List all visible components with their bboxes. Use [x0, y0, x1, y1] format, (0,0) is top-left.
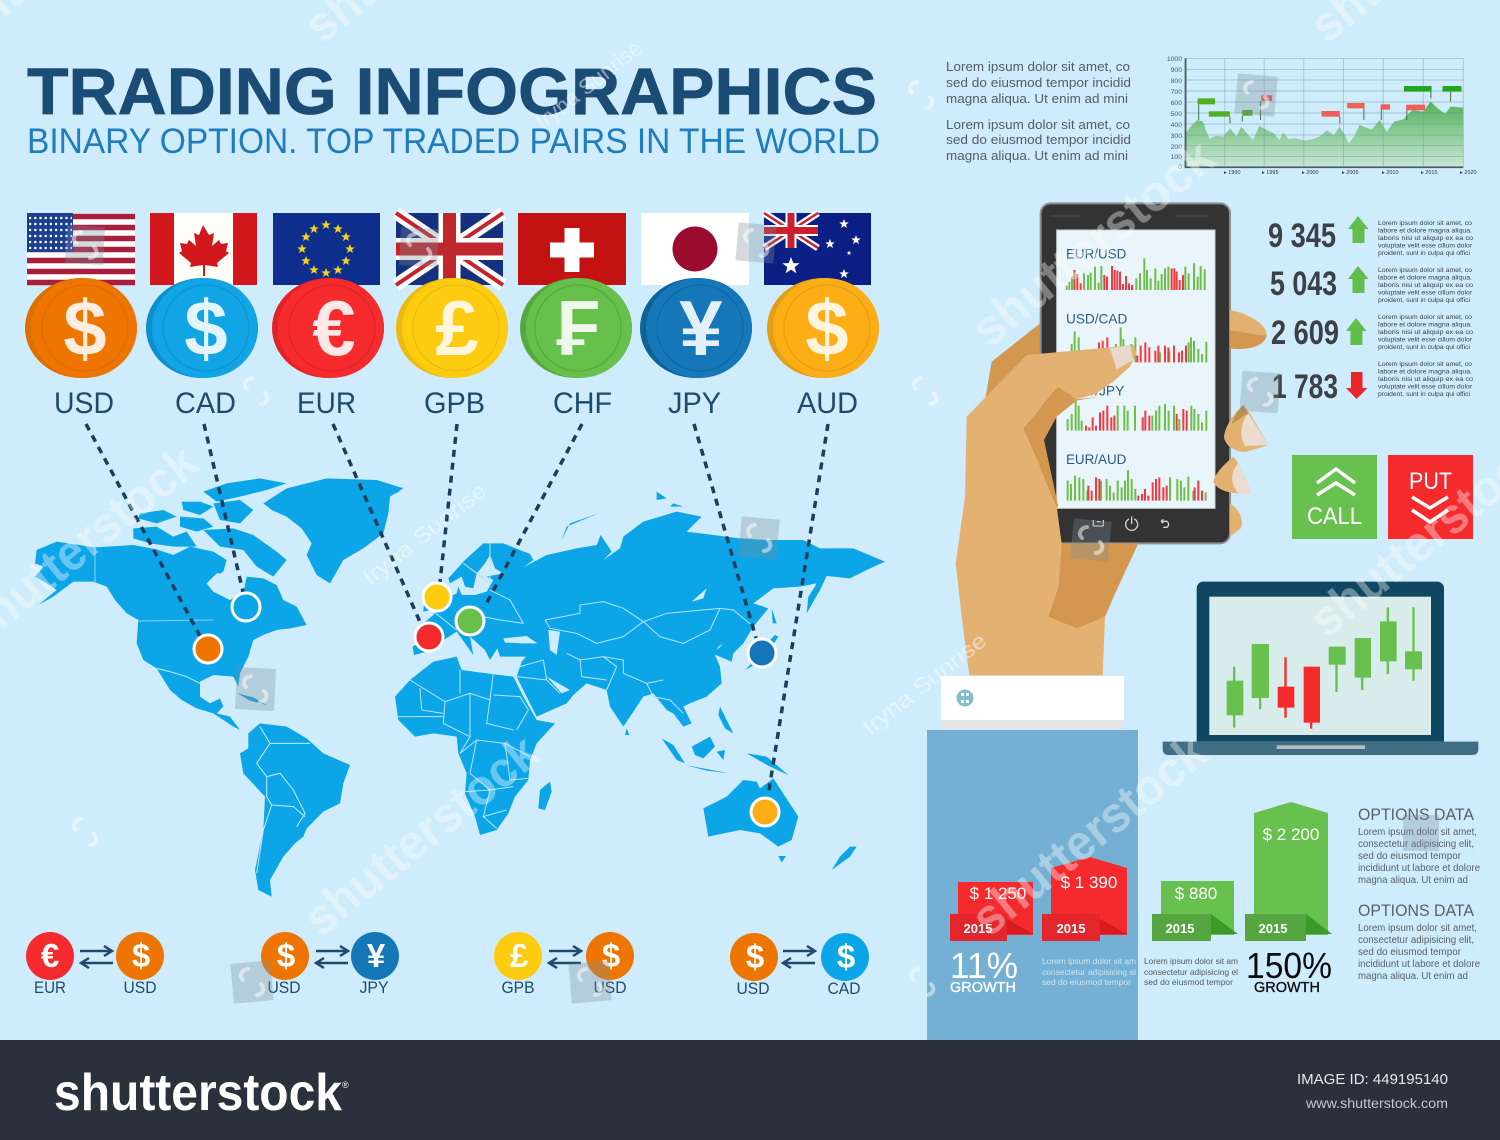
currency labels: CHF: [553, 387, 612, 420]
top-right text block: [946, 59, 1131, 163]
back of hand behind phone: [985, 323, 1043, 400]
stat descriptions: Lorem ipsum dolor sit amet, co: [1378, 267, 1473, 274]
coin: AUD: $: [805, 284, 849, 372]
coin: CAD: $: [184, 284, 228, 372]
currency labels: GPB: [424, 387, 485, 420]
11% growth: GROWTH: [950, 979, 1016, 996]
website: www.shutterstock.com: [1305, 1095, 1448, 1111]
stat: 1 783 down: 1 783: [1272, 368, 1338, 406]
stat descriptions: [1378, 220, 1474, 398]
stat descriptions: proident, sunt in culpa qui offici: [1378, 297, 1470, 304]
currency pair: EUR USD: USD: [124, 978, 156, 997]
phone buttons: [1093, 517, 1169, 530]
screen labels: EUR/USD: [1066, 247, 1126, 262]
footer logo: shutterstock: [54, 1064, 342, 1122]
shirt cuff: [941, 676, 1124, 729]
flag: Canada: [150, 213, 257, 285]
finger: middle: [1224, 405, 1268, 452]
currency labels: [54, 387, 858, 420]
area chart: 100: [1171, 154, 1182, 161]
growth bar: $ 880: 2015: [1166, 921, 1194, 936]
thumb nail: [1110, 345, 1133, 369]
growth bar: $ 1 250: 2015: [964, 921, 992, 936]
finger: ring: [1213, 457, 1252, 494]
stat descriptions: voluptate velit esse cillum dolor: [1378, 290, 1472, 296]
finger: index: [1230, 310, 1267, 349]
top-right text block: magna aliqua. Ut enim ad mini: [946, 91, 1128, 106]
currency labels: AUD: [797, 387, 858, 420]
stat descriptions: laboris nisi ut aliquip ex ea co: [1378, 282, 1474, 289]
map markers: [194, 583, 779, 826]
top-right text block: sed do eiusmod tempor incidid: [946, 132, 1131, 147]
PUT button: [1388, 455, 1473, 539]
stat descriptions: voluptate velit esse cillum dolor: [1378, 336, 1472, 344]
stat descriptions: voluptate velit esse cillum dolor: [1378, 384, 1472, 390]
top-right text block: Lorem ipsum dolor sit amet, co: [946, 59, 1130, 74]
world map: [35, 478, 885, 897]
finger: little: [1230, 503, 1242, 537]
coin: EUR: €: [312, 284, 356, 372]
growth bar: $ 1 390: $ 1 390: [1061, 873, 1117, 892]
watermark overlay: Iryna Sunrise: [358, 478, 491, 590]
area chart: 400: [1171, 122, 1182, 129]
stat descriptions: Lorem ipsum dolor sit amet, co: [1378, 220, 1473, 227]
smartphone: [1041, 203, 1230, 543]
screen labels: [1066, 247, 1127, 467]
map: Americas: [35, 478, 403, 897]
currency pair: USD JPY: ¥: [367, 937, 386, 974]
area chart: 1000: [1167, 56, 1182, 63]
chart flag stems: [1199, 92, 1451, 123]
currency pair: USD CAD: [730, 933, 869, 998]
flag: Switzerland: [518, 213, 626, 285]
options data block 1: incididunt ut labore et dolore: [1358, 862, 1480, 874]
currency pair: USD JPY: USD: [268, 978, 300, 997]
flag: United Kingdom: [396, 213, 503, 285]
bar chart: EUR/AUD: [1068, 470, 1206, 501]
currency pair: EUR USD: EUR: [34, 978, 66, 997]
sleeve: [927, 730, 1138, 1040]
growth bar: $ 880: $ 880: [1175, 884, 1217, 903]
title: TRADING INFOGRAPHICS: [27, 54, 877, 128]
currency pair: EUR USD: €: [41, 937, 59, 974]
options data block 2: Lorem ipsum dolor sit amet,: [1358, 922, 1477, 934]
currency coins row: [25, 278, 879, 378]
stat: 5 043 up: 5 043: [1270, 265, 1337, 303]
bar chart: USD/JPY: [1068, 401, 1206, 431]
coin: JPY: [640, 278, 752, 378]
stat descriptions: Lorem ipsum dolor sit amet, co: [1378, 361, 1473, 368]
stat descriptions: laboris nisi ut aliquip ex ea co: [1378, 376, 1474, 383]
inland seas: [503, 636, 537, 643]
coin: EUR: [272, 278, 384, 378]
area chart: ▸ 2010: [1382, 170, 1399, 176]
laptop with candlestick chart: [1163, 582, 1478, 755]
stat descriptions: proident, sunt in culpa qui offici: [1378, 250, 1470, 257]
options data block 1: OPTIONS DATA: [1358, 805, 1475, 824]
stat descriptions: labore et dolore magna aliqua.: [1378, 322, 1472, 328]
right fingers: [1213, 310, 1268, 537]
small text on sleeve: sed do eiusmod tempor: [1042, 977, 1131, 987]
currency pair: USD CAD: $: [746, 938, 764, 975]
watermark overlay: shutterstock: [961, 724, 1218, 947]
subtitle: BINARY OPTION. TOP TRADED PAIRS IN THE WORLD: [27, 122, 880, 161]
phone screen: [1057, 230, 1215, 508]
150% growth: 150%: [1246, 945, 1332, 986]
growth bar: $ 1 250: $ 1 250: [970, 884, 1026, 903]
top-right text block: Lorem ipsum dolor sit amet, co: [946, 117, 1130, 132]
area chart: 500: [1171, 111, 1182, 118]
screen labels: USD/CAD: [1066, 311, 1127, 326]
small text beside sleeve: [1144, 956, 1238, 987]
coin: JPY: ¥: [679, 284, 723, 372]
small text on sleeve: [1042, 956, 1136, 987]
stat descriptions: proident, sunt in culpa qui offici: [1378, 344, 1470, 351]
currency pair: GPB USD: £: [510, 937, 529, 974]
stat descriptions: proident, sunt in culpa qui offici: [1378, 391, 1470, 398]
coin: GPB: [396, 278, 508, 378]
11% growth: 11%: [950, 945, 1018, 986]
coin: USD: $: [63, 284, 107, 372]
area chart: 600: [1171, 100, 1182, 107]
stat descriptions: laboris nisi ut aliquip ex ea co: [1378, 329, 1474, 336]
150% growth: GROWTH: [1254, 979, 1320, 996]
screen labels: USD/JPY: [1066, 383, 1124, 398]
coin: CAD: [146, 278, 258, 378]
palm shadow: [1048, 543, 1138, 628]
coin: CHF: ₣: [556, 284, 600, 372]
area chart: 800: [1171, 78, 1182, 85]
currency pair: GPB USD: GPB: [502, 978, 534, 997]
dashed connector lines: [86, 424, 828, 796]
top-right text block: sed do eiusmod tempor incidid: [946, 75, 1131, 90]
currency pair: USD JPY: [261, 932, 399, 997]
growth bar: $ 1 390: 2015: [1057, 921, 1085, 936]
flag: Australia: [764, 213, 871, 285]
coin: CHF: [520, 278, 632, 378]
options data block 2: sed do eiusmod tempor: [1358, 946, 1461, 958]
options data block 1: sed do eiusmod tempor: [1358, 850, 1461, 862]
small text beside sleeve: Lorem ipsum dolor sit am: [1144, 956, 1238, 966]
candlesticks: [1227, 607, 1422, 728]
area chart: ▸ 2020: [1460, 170, 1477, 176]
bar chart: USD/CAD: [1068, 327, 1206, 362]
watermark overlay: shutterstock: [293, 724, 550, 947]
map: Eurasia, Africa and Oceania: [390, 487, 885, 870]
small text beside sleeve: sed do eiusmod tempor: [1144, 977, 1233, 987]
stat descriptions: Lorem ipsum dolor sit amet, co: [1378, 314, 1473, 321]
currency labels: JPY: [668, 387, 721, 420]
stat: 2 609 up: 2 609: [1271, 314, 1339, 352]
currency labels: USD: [54, 387, 114, 420]
CALL button: [1292, 455, 1377, 539]
area chart: ▸ 2000: [1302, 170, 1319, 176]
area chart: 900: [1171, 67, 1182, 74]
hand holding phone: [956, 345, 1138, 675]
palm and thumb: [956, 345, 1137, 675]
currency pair: USD CAD: CAD: [828, 979, 860, 998]
area chart: ▸ 1990: [1224, 170, 1241, 176]
watermark overlay: Iryna Sunrise: [858, 628, 991, 740]
footer bar: ®: [342, 1080, 349, 1090]
currency pair: USD JPY: $: [277, 937, 295, 974]
flag: European Union: [273, 213, 380, 285]
options data block 1: consectetur adipisicing elit,: [1358, 838, 1474, 850]
options data block 2: [1358, 901, 1480, 982]
growth bar: $ 1 390: [1042, 857, 1127, 941]
options data block 1: [1358, 805, 1480, 886]
area chart: ▸ 2015: [1421, 170, 1438, 176]
area chart: ▸ 2005: [1342, 170, 1359, 176]
currency labels: CAD: [175, 387, 236, 420]
currency labels: EUR: [297, 387, 356, 420]
flag: USA: [27, 213, 135, 285]
CALL button: CALL: [1307, 503, 1362, 530]
watermark overlay: Iryna Sunrise: [531, 35, 647, 134]
coin: AUD: [767, 278, 879, 378]
area chart: 700: [1171, 89, 1182, 96]
area chart: 200: [1171, 144, 1182, 151]
coin: GPB: £: [435, 284, 479, 372]
area chart: [1167, 56, 1477, 176]
currency pair: USD CAD: $: [837, 938, 855, 975]
options data block 2: OPTIONS DATA: [1358, 901, 1475, 920]
stat descriptions: voluptate velit esse cillum dolor: [1378, 242, 1472, 250]
stat descriptions: laboris nisi ut aliquip ex ea co: [1378, 235, 1474, 242]
growth bar: $ 1 250: [950, 882, 1033, 941]
options data block 1: Lorem ipsum dolor sit amet,: [1358, 826, 1477, 838]
area chart: ▸ 1995: [1262, 170, 1279, 176]
currency pair: GPB USD: USD: [594, 978, 626, 997]
area chart: 0: [1178, 164, 1182, 171]
watermark overlay: shutterstock: [961, 128, 1225, 358]
stat descriptions: labore et dolore magna aliqua.: [1378, 228, 1472, 234]
small text on sleeve: consectetur adipisicing el: [1042, 967, 1136, 977]
currency pair: GPB USD: [494, 932, 634, 997]
small text on sleeve: Lorem ipsum dolor sit am: [1042, 956, 1136, 966]
country borders: [398, 543, 753, 828]
growth bar: $ 2 200: 2015: [1259, 921, 1287, 936]
stat: 9 345 up: 9 345: [1268, 217, 1336, 255]
screen labels: EUR/AUD: [1066, 452, 1126, 467]
options data block 2: consectetur adipisicing elit,: [1358, 934, 1474, 946]
options data block 2: incididunt ut labore et dolore: [1358, 958, 1480, 970]
growth bar: $ 2 200: $ 2 200: [1263, 825, 1319, 844]
area chart: 300: [1171, 133, 1182, 140]
currency pair: USD CAD: USD: [736, 979, 770, 998]
stat descriptions: labore et dolore magna aliqua.: [1378, 274, 1472, 282]
currency pair: USD JPY: JPY: [360, 978, 388, 997]
options data block 1: magna aliqua. Ut enim ad: [1358, 874, 1468, 886]
currency pair: GPB USD: $: [602, 937, 620, 974]
flags row: [27, 213, 871, 285]
small text beside sleeve: consectetur adipisicing el: [1144, 967, 1238, 977]
currency pair: EUR USD: [26, 932, 164, 997]
PUT button: PUT: [1409, 468, 1452, 495]
footer bar: [0, 1040, 1500, 1140]
flag: Japan: [641, 213, 749, 285]
currency pair: EUR USD: $: [132, 937, 150, 974]
top-right text block: magna aliqua. Ut enim ad mini: [946, 148, 1128, 163]
stat descriptions: labore et dolore magna aliqua.: [1378, 368, 1472, 376]
image id: IMAGE ID: 449195140: [1297, 1071, 1448, 1088]
growth bar: $ 2 200: [1245, 802, 1332, 941]
growth bar: $ 880: [1152, 881, 1238, 941]
options data block 2: magna aliqua. Ut enim ad: [1358, 970, 1468, 982]
bar chart: EUR/USD: [1067, 258, 1205, 290]
coin: USD: [25, 278, 137, 378]
thumb shadow: [1023, 387, 1100, 507]
